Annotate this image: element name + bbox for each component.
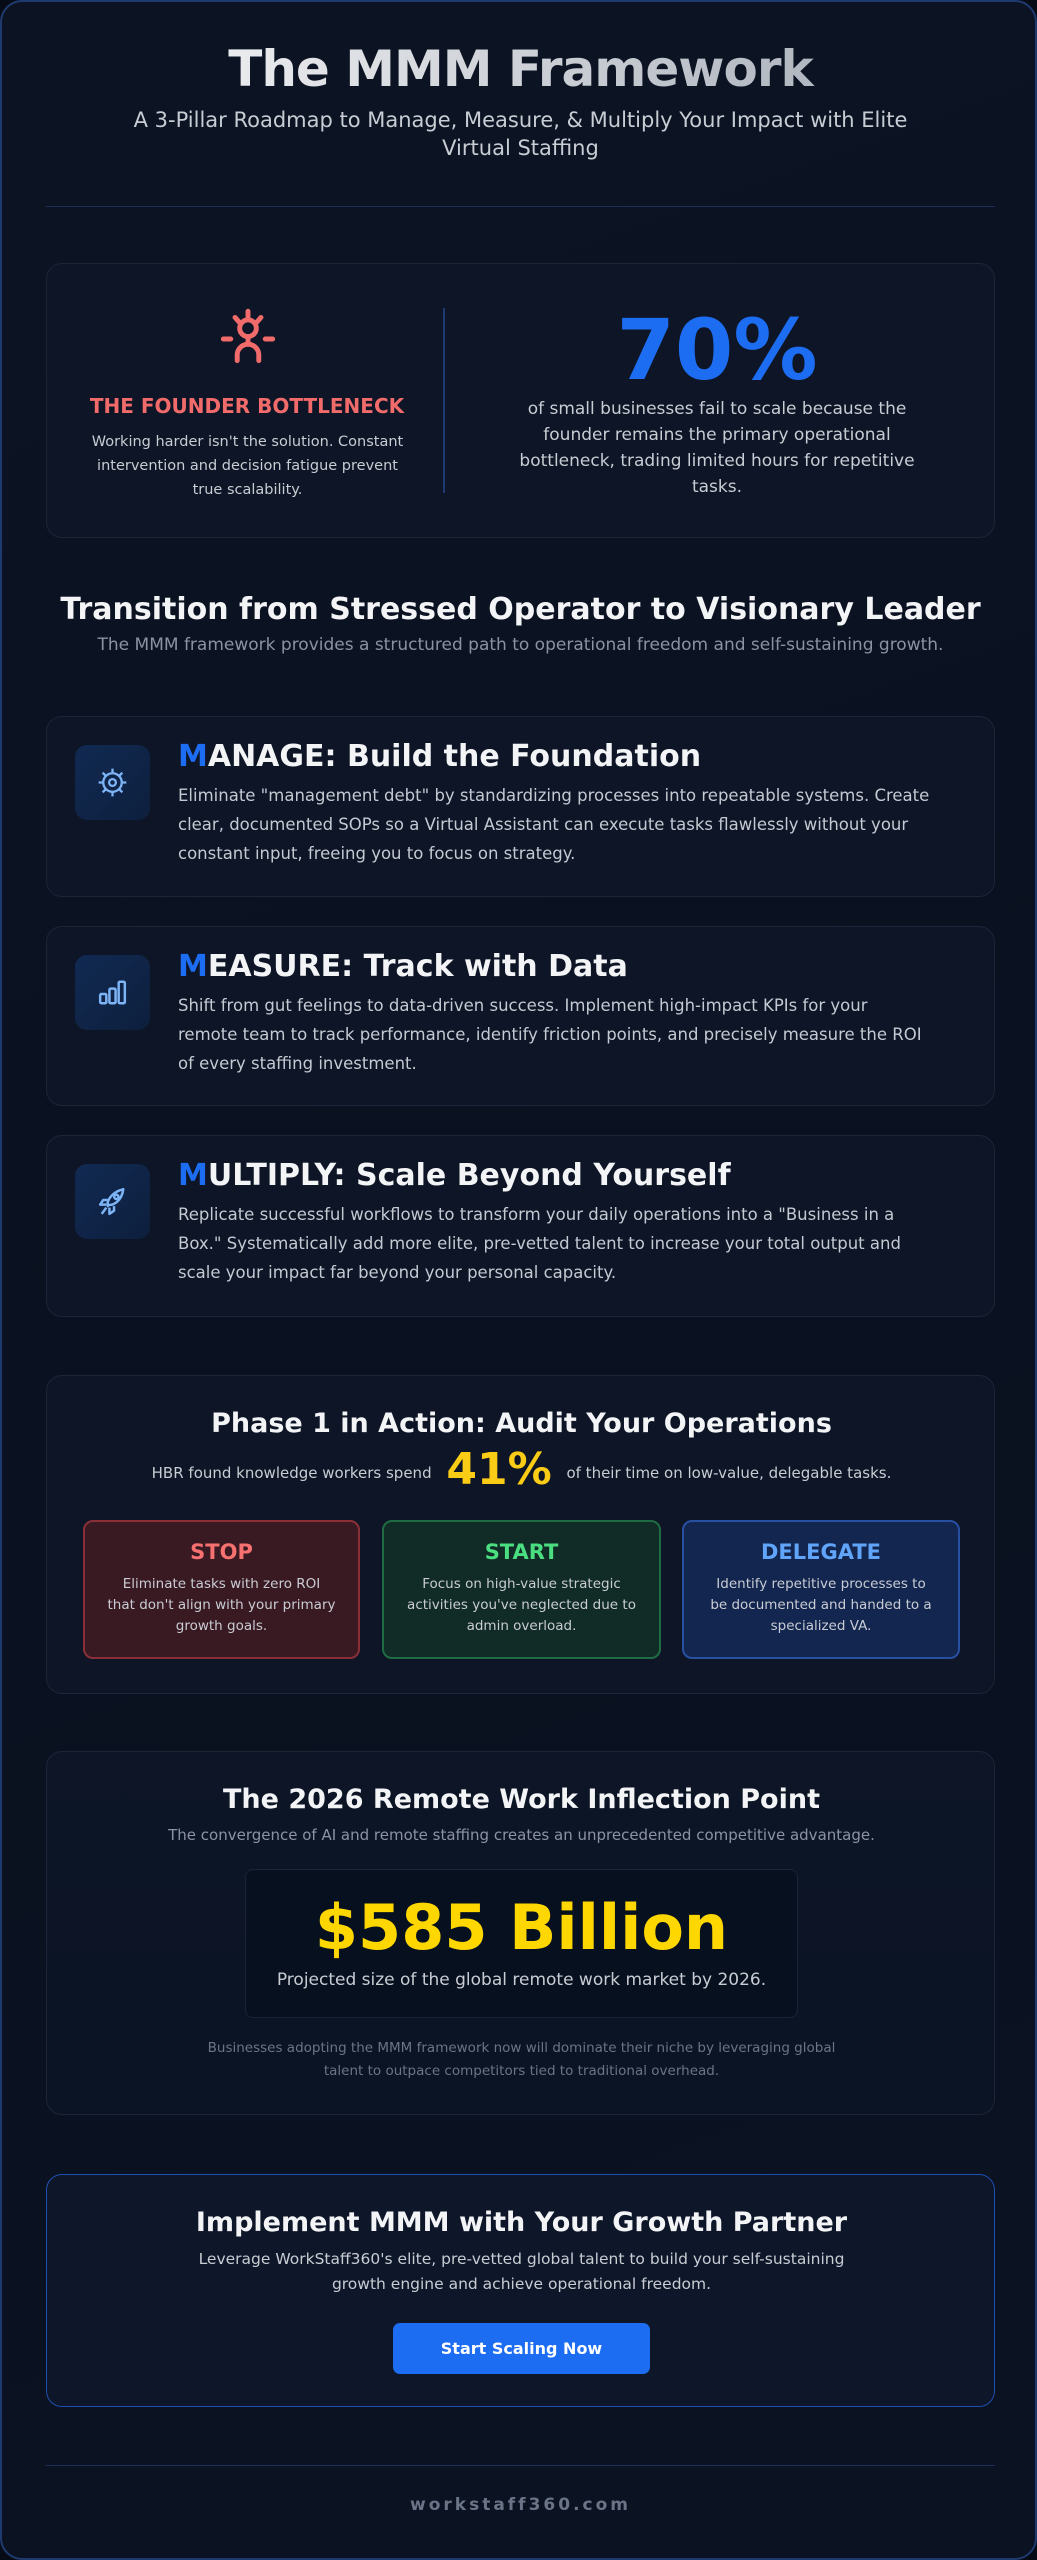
text: of every staffing investment. xyxy=(178,1054,417,1073)
box: start: START xyxy=(485,1540,558,1564)
heading: Phase 1 in Action: Audit Your Operations xyxy=(211,1408,832,1439)
icon: bar chart xyxy=(75,955,150,1030)
panel: multiply xyxy=(46,1135,995,1317)
box: stop: Eliminate tasks with zero ROI xyxy=(123,1576,320,1592)
button: Start Scaling Now xyxy=(441,2339,602,2358)
box: delegate: specialized VA. xyxy=(771,1618,871,1634)
heading: The 2026 Remote Work Inflection Point xyxy=(223,1784,820,1815)
text xyxy=(178,996,922,1073)
box: delegate: be documented and handed to a xyxy=(710,1597,932,1613)
panel: phase 1 audit xyxy=(46,1375,995,1694)
box: start: Focus on high-value strategic xyxy=(422,1576,621,1592)
subheading: The convergence of AI and remote staffing creates an unprecedented competitive advantage. xyxy=(168,1826,875,1844)
stat description: of small businesses fail to scale because the founder remains the primary operational bottleneck, trading limited hours for repetitive tasks. xyxy=(519,399,915,497)
box: start: admin overload. xyxy=(467,1618,576,1634)
title: The MMM Framework xyxy=(228,40,813,98)
text: Eliminate "management debt" by standardizing processes into repeatable systems. Create xyxy=(178,786,929,805)
icon: gear xyxy=(75,745,150,820)
label: THE FOUNDER BOTTLENECK xyxy=(90,394,404,418)
text xyxy=(178,1205,901,1282)
button xyxy=(393,2323,650,2374)
panel: CTA xyxy=(46,2174,995,2407)
text: Box." Systematically add more elite, pre-vetted talent to increase your total output and xyxy=(178,1234,901,1253)
heading: MULTIPLY: Scale Beyond Yourself xyxy=(178,1158,731,1193)
heading: MANAGE: Build the Foundation xyxy=(178,739,701,774)
panel: founder bottleneck xyxy=(46,263,995,538)
text: clear, documented SOPs so a Virtual Assistant can execute tasks flawlessly without your xyxy=(178,815,908,834)
description: Working harder isn't the solution. Constant intervention and decision fatigue prevent true scalability. xyxy=(92,434,403,498)
heading: Implement MMM with Your Growth Partner xyxy=(196,2207,847,2238)
box: delegate: DELEGATE xyxy=(761,1540,881,1564)
text: remote team to track performance, identify friction points, and precisely measure the ROI xyxy=(178,1025,922,1044)
stat box: $585 Billion: $585 Billion xyxy=(315,1891,728,1964)
stat box: $585 Billion: Projected size of the global remote work market by 2026. xyxy=(277,1970,766,1990)
text xyxy=(178,786,929,863)
footer: workstaff360.com xyxy=(410,2495,631,2515)
stat line: HBR found knowledge workers spend 41% of their time on low-value, delegable tasks. xyxy=(152,1444,891,1495)
box: delegate xyxy=(682,1520,960,1659)
box: stop xyxy=(83,1520,360,1659)
stat box: $585 Billion xyxy=(245,1869,798,2018)
panel: measure xyxy=(46,926,995,1106)
icon: rocket xyxy=(75,1164,150,1239)
text: Shift from gut feelings to data-driven success. Implement high-impact KPIs for your xyxy=(178,996,868,1015)
heading: transition: Transition from Stressed Operator to Visionary Leader xyxy=(60,592,981,627)
heading: MEASURE: Track with Data xyxy=(178,949,628,984)
text: Leverage WorkStaff360's elite, pre-vetted global talent to build your self-sustaining growth engine and achieve operational freedom. xyxy=(199,2250,844,2293)
box: stop: growth goals. xyxy=(176,1618,267,1634)
box: delegate: Identify repetitive processes to xyxy=(716,1576,926,1592)
text: scale your impact far beyond your personal capacity. xyxy=(178,1263,616,1282)
text: constant input, freeing you to focus on strategy. xyxy=(178,844,575,863)
stat: 70%: 70% xyxy=(616,301,818,399)
box: stop: STOP xyxy=(190,1540,253,1564)
title xyxy=(2,40,1037,98)
subheading: The MMM framework provides a structured path to operational freedom and self-sustaining growth. xyxy=(98,635,943,655)
subtitle: A 3-Pillar Roadmap to Manage, Measure, & Multiply Your Impact with Elite Virtual Staffing xyxy=(134,108,907,160)
panel: 2026 inflection point xyxy=(46,1751,995,2115)
box: start: activities you've neglected due to xyxy=(407,1597,636,1613)
icon: stressed founder xyxy=(220,308,276,363)
box: stop: that don't align with your primary xyxy=(108,1597,336,1613)
panel: manage xyxy=(46,716,995,897)
footnote: Businesses adopting the MMM framework now will dominate their niche by leveraging global talent to outpace competitors tied to traditional overhead. xyxy=(208,2040,835,2079)
text: Replicate successful workflows to transform your daily operations into a "Business in a xyxy=(178,1205,894,1224)
box: start xyxy=(382,1520,661,1659)
